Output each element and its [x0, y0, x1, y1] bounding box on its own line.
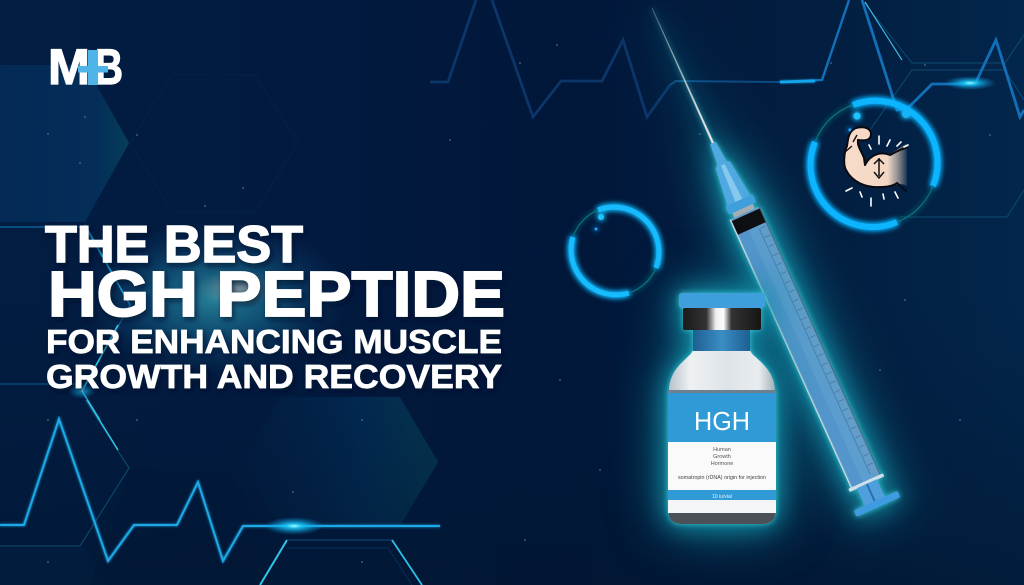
logo	[48, 39, 123, 95]
vial cap	[679, 293, 765, 308]
needle hub	[699, 137, 759, 220]
ECG line: top middle	[430, 0, 780, 117]
ECG line: bottom left	[0, 419, 440, 561]
label: name: Human	[713, 447, 731, 453]
logo: B	[95, 39, 123, 95]
vial glass body	[669, 350, 775, 524]
vial	[668, 293, 776, 524]
label: HGH: HGH	[694, 406, 750, 436]
title line 1: THE BEST	[45, 216, 303, 274]
label: name: Growth	[713, 454, 731, 460]
vial metal crimp	[683, 308, 761, 330]
needle	[651, 8, 716, 148]
syringe barrel	[730, 206, 881, 490]
label: origin: somatropin (rDNA) origin for injection	[678, 475, 766, 481]
title line 2: HGH PEPTIDE	[48, 258, 505, 330]
title	[45, 216, 505, 396]
ring: muscle icon	[811, 101, 938, 227]
ECG line and hex lines: top right	[780, 0, 1024, 217]
label: dosage: 10 iu/vial	[712, 494, 732, 500]
vial neck	[693, 330, 750, 351]
logo: M	[48, 39, 90, 95]
title glow	[80, 220, 350, 376]
icon: flexed muscle arm	[844, 127, 908, 206]
syringe	[631, 0, 900, 517]
title line 4: GROWTH AND RECOVERY	[46, 359, 502, 396]
title line 3: FOR ENHANCING MUSCLE	[46, 324, 502, 361]
label: name: Hormone	[711, 461, 733, 467]
label: name	[711, 447, 733, 467]
hex lines: left middle	[0, 225, 260, 420]
ring: left	[571, 207, 659, 295]
hex lines: bottom	[0, 400, 422, 585]
vial label	[668, 390, 776, 524]
plunger and flange	[845, 471, 900, 517]
